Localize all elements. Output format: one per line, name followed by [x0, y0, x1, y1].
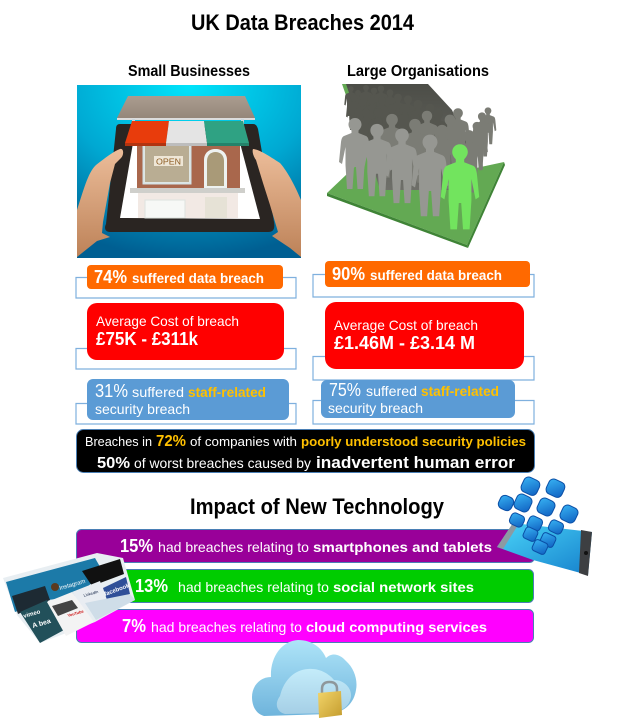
bar: cloud computing services: 7% [122, 616, 146, 636]
icon: smartphone with floating app icons [497, 475, 592, 576]
stat: 75% staff-related breach: suffered [366, 383, 417, 399]
bar: social network sites: 13% [135, 576, 168, 596]
site labels: Instagram [59, 579, 86, 592]
bar: social network sites [76, 570, 534, 602]
callout: human error and security policies: poorly understood security policies [301, 435, 526, 449]
stat: 75% staff-related breach [313, 380, 534, 424]
stat: 31% staff-related breach [76, 379, 296, 424]
bar: social network sites: social network sites [333, 579, 474, 595]
heading: small businesses: Small Businesses [128, 63, 250, 80]
bar: smartphones and tablets: had breaches relating to [158, 539, 309, 555]
stat: 74% suffered data breach: suffered data breach [132, 270, 264, 286]
bar: social network sites: had breaches relating to [178, 579, 329, 595]
bar: cloud computing services: cloud computing services [306, 619, 487, 635]
stat: 74% suffered data breach: 74% [94, 267, 127, 287]
stat: 90% suffered data breach: suffered data breach [370, 267, 502, 283]
back rows of figures [344, 84, 470, 190]
green figure [441, 144, 479, 229]
site labels: YouTube [67, 608, 85, 618]
stat: average cost of breach: £75K - £311k [96, 329, 199, 349]
stat: 31% staff-related breach: staff-related [188, 384, 266, 400]
callout: human error and security policies: of companies with [190, 435, 297, 449]
stat: average cost of breach [76, 303, 296, 369]
callout: human error and security policies: 50% [97, 455, 130, 472]
stat: average cost of breach: £1.46M - £3.14 M [334, 333, 475, 353]
title: UK Data Breaches 2014 [191, 10, 415, 35]
bar: cloud computing services [76, 610, 534, 642]
stat: 90% suffered data breach: 90% [332, 264, 365, 284]
site labels: LinkedIn [83, 589, 99, 598]
stat: 75% staff-related breach: staff-related [421, 383, 499, 399]
padlock [318, 682, 342, 718]
icon: cloud with padlock [252, 640, 357, 718]
stat: 31% staff-related breach: security breach [95, 401, 190, 417]
open sign: OPEN [156, 156, 181, 166]
stat: 75% staff-related breach: 75% [329, 380, 361, 400]
stat: 75% staff-related breach: security breach [328, 400, 423, 416]
callout: human error and security policies: Breaches in [85, 435, 152, 449]
site labels [23, 579, 131, 630]
image: crowd of grey figures with one green figure [325, 84, 512, 250]
site labels: facebook [104, 583, 131, 598]
stat: average cost of breach: Average Cost of breach [96, 313, 239, 329]
panel: large organisation statistics [313, 261, 534, 424]
site labels: vimeo [23, 609, 42, 620]
heading: large organisations: Large Organisations [347, 63, 489, 80]
callout: human error and security policies [76, 430, 534, 472]
bar: cloud computing services: had breaches relating to [151, 619, 302, 635]
stat: 74% suffered data breach [76, 265, 296, 298]
stat: 31% staff-related breach: suffered [132, 384, 184, 400]
bar: smartphones and tablets: 15% [120, 536, 153, 556]
image: shop on a tablet held in hands [77, 85, 301, 258]
callout: human error and security policies: 72% [156, 433, 186, 450]
heading: impact of new technology: Impact of New Technology [190, 494, 445, 519]
stat: 90% suffered data breach [313, 261, 534, 297]
callout: human error and security policies: of worst breaches caused by [134, 455, 311, 471]
stat: average cost of breach: Average Cost of breach [334, 317, 478, 333]
panel: small business statistics [76, 265, 296, 424]
icon: social network website collage [3, 553, 135, 643]
stat: 31% staff-related breach: 31% [95, 381, 128, 401]
callout: human error and security policies: inadvertent human error [316, 454, 516, 472]
bar: smartphones and tablets: smartphones and tablets [313, 539, 492, 555]
stat: average cost of breach [313, 302, 534, 380]
site labels: A bea [32, 618, 52, 630]
bar: smartphones and tablets [76, 530, 534, 562]
